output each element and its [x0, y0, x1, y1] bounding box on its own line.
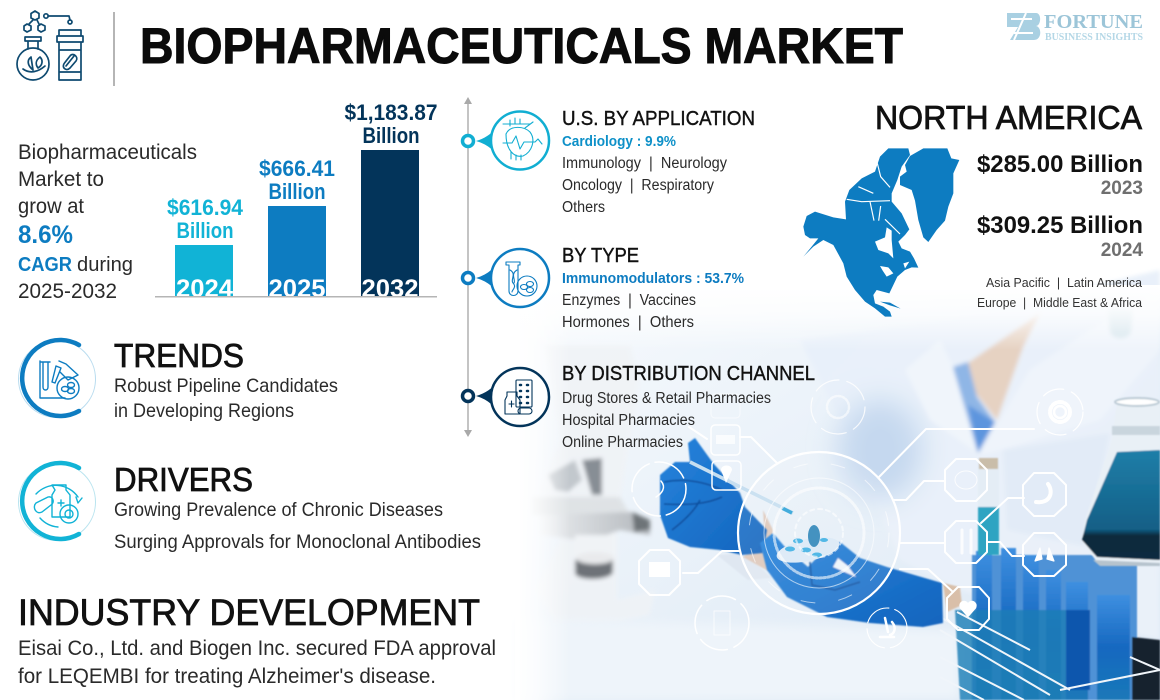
left fade of photo [515, 280, 570, 700]
Greenland [900, 148, 959, 242]
pipette cyan tip [782, 508, 792, 513]
icon: heart [947, 587, 989, 630]
conical flask with dark liquid [1082, 398, 1160, 566]
icon: phone [711, 394, 740, 418]
type text: Enzymes | Vaccines [562, 292, 696, 309]
other regions [977, 275, 1143, 310]
left lapel [905, 340, 978, 453]
icon: checklist [695, 596, 749, 650]
bar 2024: Billion [176, 218, 234, 243]
other regions: Europe | Middle East & Africa [977, 295, 1143, 310]
label 2024: 2024 [1101, 240, 1143, 261]
icon: microscope [867, 608, 907, 648]
trends heading: TRENDS [114, 337, 244, 374]
CAGR text block: during [77, 254, 133, 276]
icon: gear [1037, 389, 1083, 435]
bottle [57, 30, 83, 80]
blue glove upper hand [660, 438, 767, 555]
panel: by application [462, 108, 755, 216]
icon: DNA tube pin [462, 249, 549, 307]
industry development text: Eisai Co., Ltd. and Biogen Inc. secured FDA approval [18, 636, 496, 660]
bar 2024 [167, 195, 244, 303]
icon: location pin [712, 461, 741, 490]
application text [562, 108, 755, 216]
microscope objectives [548, 460, 582, 492]
neck skin [968, 313, 1040, 420]
icon: virus [811, 380, 865, 434]
header divider [113, 12, 115, 86]
bar 2025: Billion [268, 179, 326, 204]
industry development heading: INDUSTRY DEVELOPMENT [18, 592, 480, 633]
microscope column [575, 535, 617, 563]
Hudson Bay [875, 227, 893, 258]
distribution text: BY DISTRIBUTION CHANNEL [562, 363, 815, 385]
icon: heart pin [462, 112, 549, 170]
logo wordmark: FORTUNE [1044, 11, 1143, 33]
icon: lungs [1023, 533, 1066, 576]
application text: Oncology | Respiratory [562, 177, 714, 194]
map: north america [803, 148, 959, 317]
title: BIOPHARMACEUTICALS MARKET [140, 18, 903, 74]
type text: BY TYPE [562, 245, 639, 267]
panel: drivers [18, 461, 481, 553]
microscope clamp [632, 512, 650, 532]
mainland with Canadian archipelago [803, 148, 918, 317]
header icon: flask and medicine bottle [17, 11, 83, 80]
CAGR text block: Market to [18, 168, 104, 191]
petri dish [774, 533, 842, 567]
distribution text: Online Pharmacies [562, 434, 683, 451]
inner rings [749, 463, 889, 603]
logo tagline: BUSINESS INSIGHTS [1045, 32, 1143, 43]
wrist skin [743, 510, 773, 572]
label 2023: 2023 [1101, 178, 1143, 199]
north america heading: NORTH AMERICA [875, 99, 1142, 136]
bar chart [155, 100, 438, 303]
CAGR text block: 8.6% [18, 221, 73, 249]
bar 2032 [344, 100, 438, 303]
sleeve below upper hand [717, 553, 772, 580]
trends text: Robust Pipeline Candidates [114, 375, 338, 397]
type text [562, 245, 744, 331]
digital overlay network [632, 380, 1083, 650]
panel: north america [803, 99, 1143, 317]
icon: trends ring with lab hand [18, 340, 96, 418]
sample droplet [808, 525, 820, 547]
chart baseline [155, 296, 437, 298]
lab coat [800, 270, 1160, 640]
blue shirt [953, 362, 995, 453]
drivers text: Growing Prevalence of Chronic Diseases [114, 499, 443, 521]
value 2024: $309.25 Billion [977, 212, 1143, 239]
CAGR text block [18, 141, 197, 303]
panel: industry development: for LEQEMBI for treating Alzheimer's disease. [18, 664, 436, 688]
microscope under stage [540, 512, 650, 541]
table surface [520, 620, 960, 700]
icon: folder [639, 550, 680, 595]
bar 2032: Billion [362, 123, 420, 148]
icon: stomach [1023, 473, 1066, 516]
CAGR text block: 2025-2032 [18, 280, 117, 303]
panel: by type [462, 245, 744, 331]
application text: Others [562, 199, 605, 216]
blue glove lower hand [760, 533, 943, 627]
right lapel [980, 290, 1160, 455]
CAGR text block: grow at [18, 195, 84, 218]
icon: hand ring [632, 462, 686, 516]
logo: Fortune Business Insights [1007, 11, 1143, 43]
coat pocket [1003, 433, 1110, 547]
icon: body figures [945, 521, 987, 563]
panel: by distribution channel [462, 363, 815, 451]
distribution text: Hospital Pharmacies [562, 412, 695, 429]
bar 2025 [259, 156, 335, 303]
bar 2024: 2024 [176, 275, 233, 303]
CAGR text block: Biopharmaceuticals [18, 141, 197, 164]
connector lines [683, 427, 1034, 592]
central large circle [738, 452, 900, 614]
distribution text: Drug Stores & Retail Pharmacies [562, 390, 771, 407]
photo base tone [520, 290, 1160, 700]
flask [17, 37, 49, 80]
arctic channels [847, 163, 900, 234]
other regions: Asia Pacific | Latin America [986, 275, 1143, 290]
far wrist skin [943, 583, 962, 612]
hanging droplet [1108, 310, 1133, 338]
Great Lakes [880, 262, 909, 277]
cyan sample dots [785, 538, 828, 558]
microscope arm [535, 345, 655, 624]
panel: industry development [18, 592, 496, 688]
icon: ambulance [711, 425, 740, 455]
top fade of photo [515, 285, 1160, 350]
application text: U.S. BY APPLICATION [562, 108, 755, 130]
bar 2032: 2032 [362, 275, 418, 303]
Cuba [880, 302, 901, 309]
microscope stage [532, 497, 632, 515]
connector tube [44, 14, 72, 24]
panel: trends: in Developing Regions [114, 400, 294, 422]
application text: Cardiology : 9.9% [562, 134, 676, 150]
molecule [24, 11, 45, 32]
CAGR text block: CAGR [18, 254, 73, 276]
microscope ring [575, 556, 613, 579]
icon: drivers ring with medicine bottle [18, 463, 96, 540]
type text: Hormones | Others [562, 314, 694, 331]
distribution text [562, 363, 815, 451]
white microscope [532, 345, 655, 624]
bar 2025: 2025 [268, 275, 326, 303]
vertical arrow axis [464, 97, 472, 437]
icon: brain [945, 459, 987, 501]
value 2023: $285.00 Billion [977, 151, 1143, 178]
standing glass tube [978, 458, 999, 555]
panel: trends [18, 337, 338, 422]
bar 2032: $1,183.87 [344, 100, 438, 125]
drivers heading: DRIVERS [114, 461, 253, 498]
background photo: scientist with glove hands and digital health icons [515, 270, 1160, 700]
application text: Immunology | Neurology [562, 155, 727, 172]
pipette [690, 462, 793, 513]
icon: pharmacy pin [462, 368, 549, 426]
logo mark [1007, 13, 1040, 40]
blue test tubes [955, 548, 1160, 700]
type text: Immunomodulators : 53.7% [562, 271, 744, 287]
bar 2024: $616.94 [167, 195, 244, 220]
panel: drivers: Surging Approvals for Monoclonal Antibodies [114, 531, 481, 553]
test tube rack [940, 612, 1160, 700]
bar 2025: $666.41 [259, 156, 335, 181]
